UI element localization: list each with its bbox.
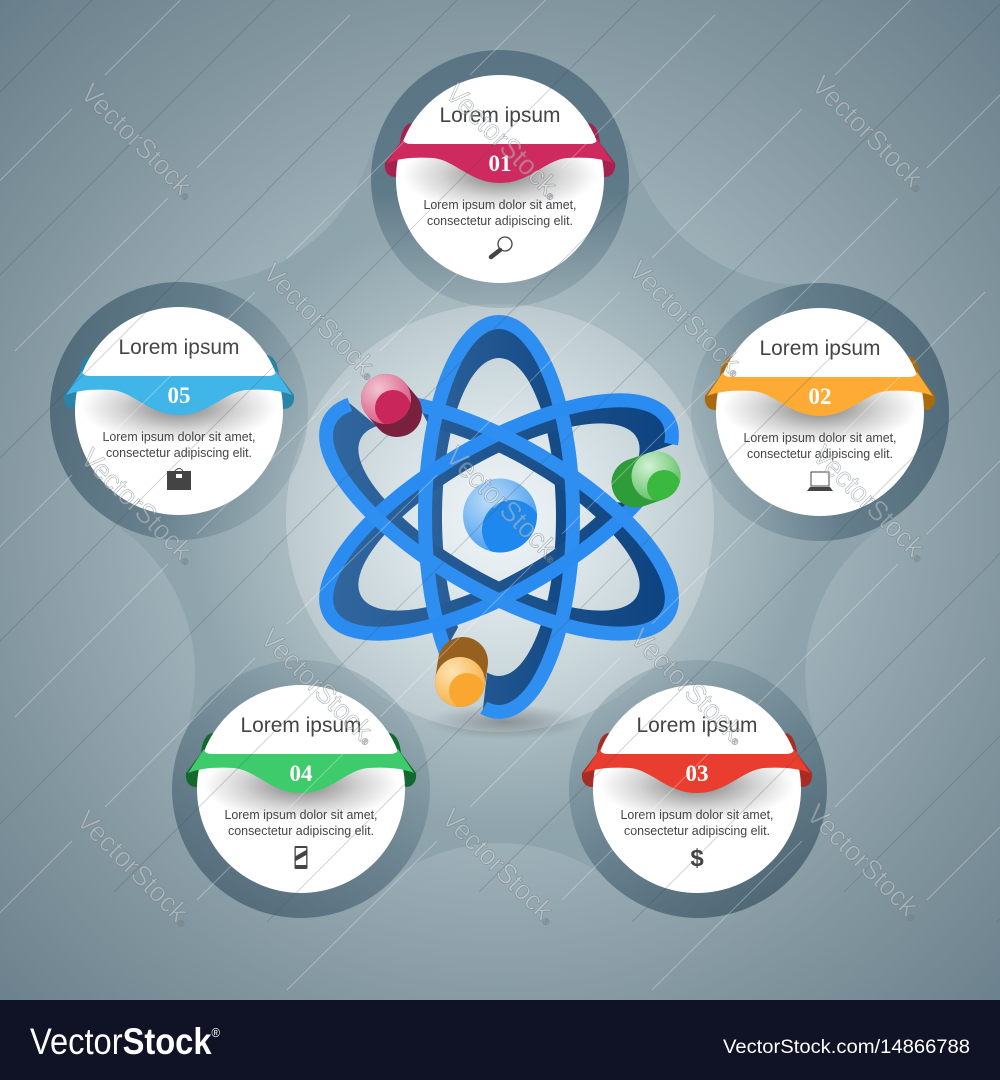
- ribbon back folds: [705, 356, 935, 410]
- description line 2: consectetur adipiscing elit.: [747, 447, 893, 461]
- description: Lorem ipsum dolor sit amet,: [744, 431, 896, 445]
- watermarks: VectorStock®: [807, 439, 935, 568]
- footer url: VectorStock.com/14866788: [723, 1037, 970, 1058]
- watermarks: VectorStock®: [801, 798, 929, 927]
- watermarks: VectorStock®: [255, 622, 383, 751]
- ribbon shadow: [210, 768, 392, 819]
- ribbon: [66, 371, 292, 415]
- description line 2: consectetur adipiscing elit.: [624, 824, 770, 838]
- card 04: [172, 660, 430, 918]
- card circle: [396, 75, 604, 283]
- card circle: [716, 308, 924, 516]
- atom extruded depth: [285, 316, 713, 718]
- watermarks: VectorStock®: [440, 77, 568, 206]
- watermarks: VectorStock®: [806, 69, 934, 198]
- card 03: [569, 660, 827, 918]
- footer logo: VectorStock: [30, 1021, 223, 1062]
- watermarks: VectorStock®: [436, 802, 564, 931]
- title: Lorem ipsum: [760, 337, 880, 360]
- description line 2: consectetur adipiscing elit.: [427, 214, 573, 228]
- ribbon back folds: [582, 733, 812, 787]
- ribbon shadow: [410, 158, 590, 209]
- ribbon back folds: [385, 123, 615, 177]
- watermarks: VectorStock®: [623, 254, 751, 383]
- background inner star shape: [113, 140, 887, 875]
- ring: [691, 283, 949, 541]
- ribbon back folds: [186, 733, 416, 787]
- description line 2: consectetur adipiscing elit.: [228, 824, 374, 838]
- card 01: [371, 50, 629, 308]
- ring: [172, 660, 430, 918]
- number: 05: [168, 383, 190, 408]
- ribbon back folds: [64, 355, 294, 409]
- ring: [371, 50, 629, 308]
- description: Lorem ipsum dolor sit amet,: [224, 808, 378, 822]
- watermarks: VectorStock®: [75, 77, 203, 206]
- footer logo: ®: [212, 1025, 220, 1040]
- number: 04: [290, 761, 313, 786]
- title patch: [205, 686, 397, 759]
- title: Lorem ipsum: [440, 104, 560, 127]
- ring: [569, 660, 827, 918]
- title patch: [601, 686, 793, 759]
- ribbon: [707, 372, 933, 416]
- electron: orange: [435, 657, 485, 709]
- ribbon shadow: [88, 390, 270, 441]
- card circle: [197, 685, 405, 893]
- card circle: [593, 685, 801, 893]
- watermarks: [71, 69, 935, 933]
- number: 03: [686, 761, 708, 786]
- icon: phone: [294, 846, 308, 869]
- title patch: [83, 308, 275, 381]
- title: Lorem ipsum: [636, 714, 758, 737]
- watermarks: VectorStock®: [75, 442, 203, 571]
- icon: briefcase: [167, 468, 191, 490]
- watermarks: VectorStock®: [440, 440, 568, 569]
- central light circle: [286, 304, 714, 732]
- ring: [50, 282, 308, 540]
- icon: magnifier: [491, 237, 512, 257]
- number: 02: [808, 384, 832, 409]
- atom icon: [319, 315, 680, 719]
- ribbon: [584, 749, 810, 793]
- number: 01: [488, 151, 512, 176]
- description: Lorem ipsum dolor sit amet,: [620, 808, 774, 822]
- ribbon: [387, 139, 613, 183]
- description line 2: consectetur adipiscing elit.: [106, 446, 252, 460]
- electron: green: [632, 452, 681, 504]
- description: Lorem ipsum dolor sit amet,: [424, 198, 576, 212]
- atom front orbits: [293, 322, 705, 712]
- nucleus: [463, 478, 537, 552]
- atom floor shadow: [425, 704, 585, 740]
- title patch: [724, 309, 916, 382]
- ribbon shadow: [730, 391, 910, 442]
- watermarks: VectorStock®: [71, 804, 199, 933]
- watermarks: VectorStock®: [625, 622, 753, 751]
- electron: red: [361, 374, 411, 426]
- icon: laptop: [807, 472, 833, 491]
- card circle: [75, 307, 283, 515]
- watermarks: VectorStock®: [257, 257, 385, 386]
- title: Lorem ipsum: [240, 714, 362, 737]
- icon: dollar: $: [690, 845, 704, 872]
- ribbon: [188, 749, 414, 793]
- card 05: [50, 282, 308, 540]
- footer bar: [0, 1000, 1000, 1080]
- card 02: [691, 283, 949, 541]
- description: Lorem ipsum dolor sit amet,: [102, 430, 256, 444]
- ribbon shadow: [606, 768, 788, 819]
- title patch: [404, 76, 596, 149]
- title: Lorem ipsum: [118, 336, 240, 359]
